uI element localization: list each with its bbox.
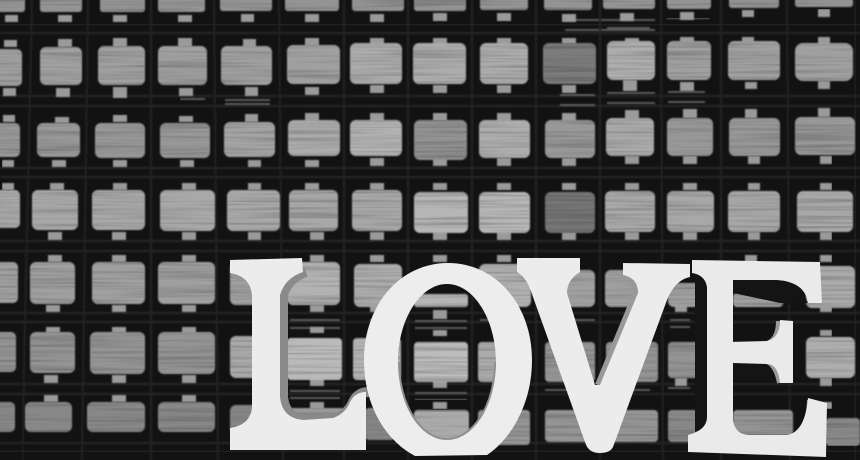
letters: LOVE xyxy=(230,258,827,457)
tile row 1 xyxy=(0,0,853,12)
letter V xyxy=(517,258,690,453)
tile row 3 xyxy=(0,117,855,160)
tile row 6 xyxy=(0,332,855,382)
letter L xyxy=(230,258,369,450)
tile row 7 xyxy=(0,402,860,446)
tile row 4 xyxy=(0,190,853,233)
tile row 5 xyxy=(0,262,855,308)
letter O xyxy=(364,263,532,456)
letter E xyxy=(688,260,827,457)
bright strand highlights xyxy=(180,18,710,400)
tile row 2 xyxy=(0,41,853,86)
